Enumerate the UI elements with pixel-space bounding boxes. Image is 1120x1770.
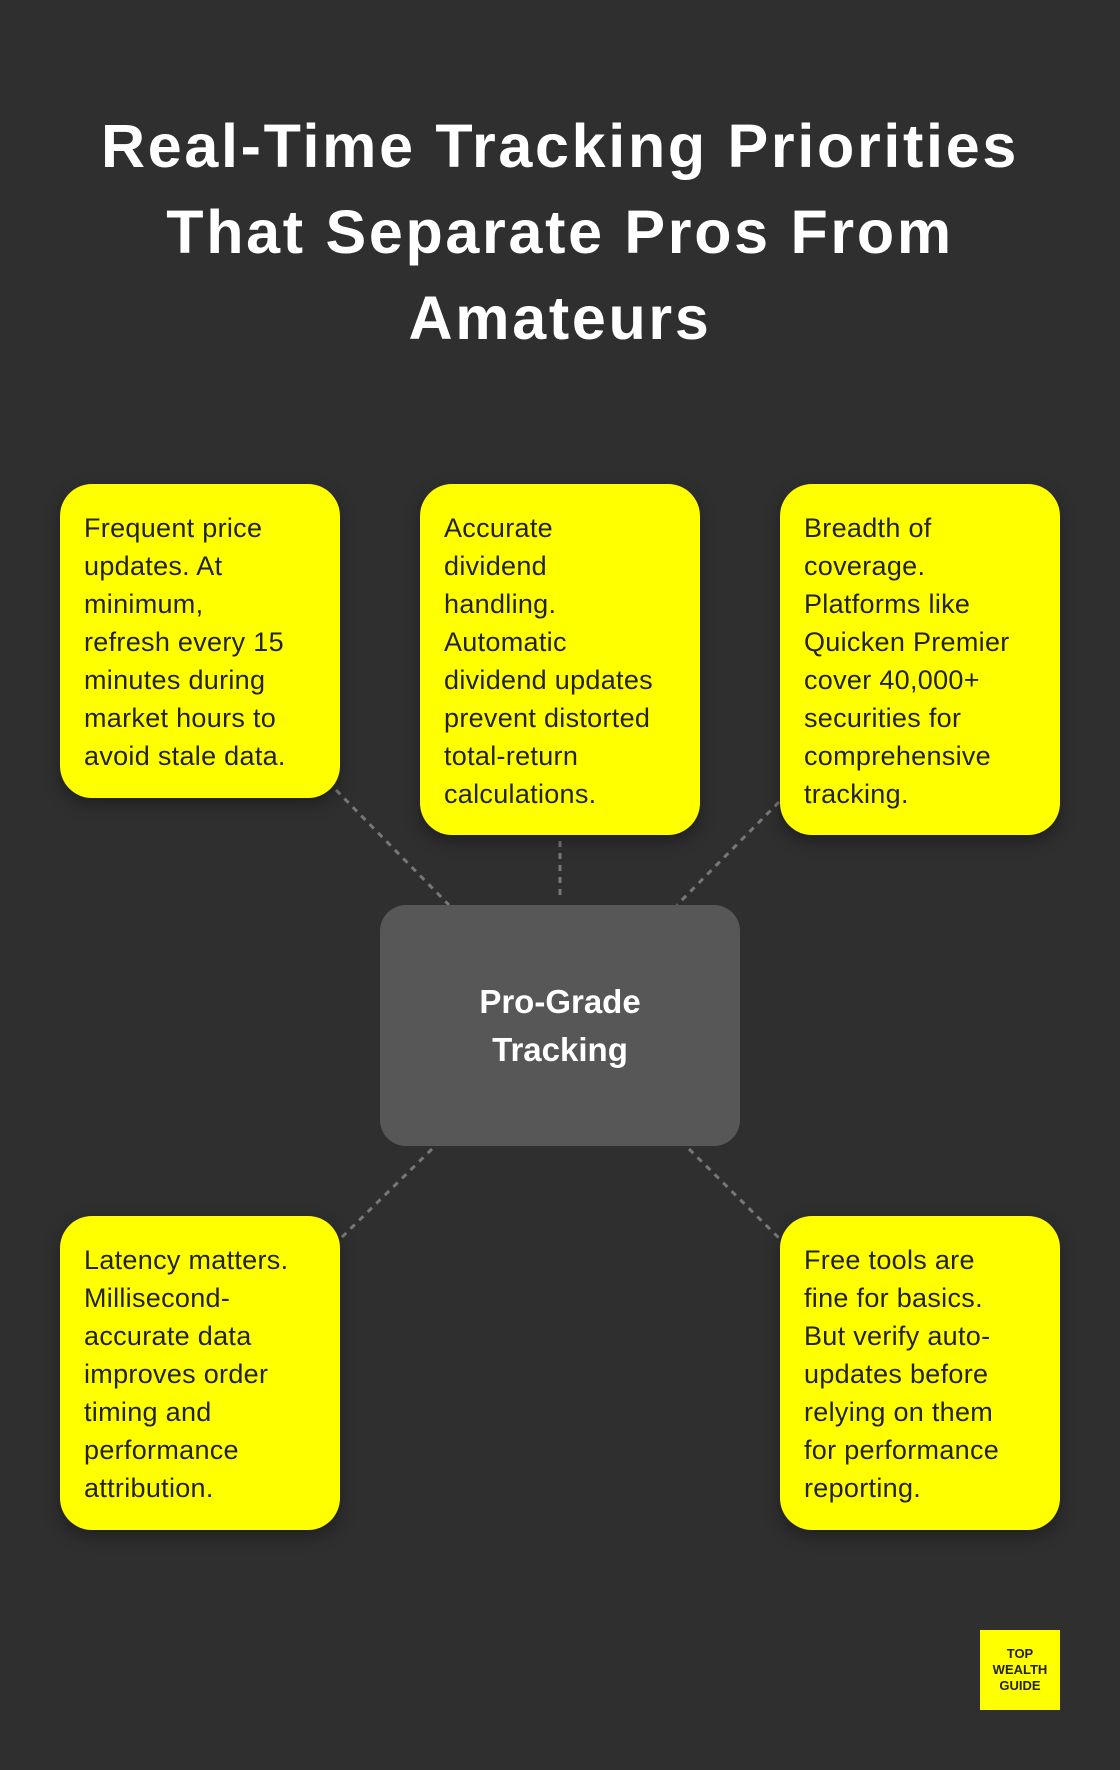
panel: breadth of coverage: Platforms like [804, 589, 970, 619]
panel: latency: timing and [84, 1397, 212, 1427]
panel: frequent price updates: updates. At [84, 551, 222, 581]
panel: free tools: for performance [804, 1435, 999, 1465]
panel: dividend handling: total-return [444, 741, 578, 771]
panel: breadth of coverage: comprehensive [804, 741, 991, 771]
panel: frequent price updates: Frequent price [84, 513, 262, 543]
panel: dividend handling: Accurate [444, 513, 553, 543]
panel: free tools: relying on them [804, 1397, 993, 1427]
panel: frequent price updates: refresh every 15 [84, 627, 284, 657]
panel: free tools [780, 1216, 1060, 1530]
panel: latency: Millisecond- [84, 1283, 230, 1313]
panel: latency [60, 1216, 340, 1530]
panel: free tools: But verify auto- [804, 1321, 990, 1351]
center node: Tracking [492, 1030, 628, 1068]
panel: latency: accurate data [84, 1321, 252, 1351]
panel: breadth of coverage: cover 40,000+ [804, 665, 980, 695]
panel: frequent price updates: avoid stale data. [84, 741, 286, 771]
panel: breadth of coverage [780, 484, 1060, 835]
logo [980, 1630, 1060, 1710]
panel: latency: performance [84, 1435, 239, 1465]
panel: dividend handling: calculations. [444, 779, 596, 809]
title: Real-Time Tracking Priorities [101, 112, 1019, 180]
panel: frequent price updates: minutes during [84, 665, 265, 695]
title [101, 112, 1019, 352]
logo: TOP [1007, 1646, 1033, 1661]
panel: free tools: updates before [804, 1359, 988, 1389]
title: Amateurs [408, 284, 711, 352]
logo: GUIDE [999, 1678, 1041, 1693]
panel: breadth of coverage: Quicken Premier [804, 627, 1010, 657]
center node [380, 905, 740, 1146]
panel: latency: Latency matters. [84, 1245, 288, 1275]
panel: frequent price updates: market hours to [84, 703, 276, 733]
panel: dividend handling [420, 484, 700, 835]
panel: free tools: reporting. [804, 1473, 921, 1503]
panel: dividend handling: dividend [444, 551, 547, 581]
panel: breadth of coverage: securities for [804, 703, 961, 733]
title: That Separate Pros From [166, 198, 954, 266]
center node: Pro-Grade [479, 982, 641, 1020]
panel: latency: attribution. [84, 1473, 214, 1503]
panel: latency: improves order [84, 1359, 268, 1389]
panel: breadth of coverage: coverage. [804, 551, 925, 581]
panel: dividend handling: Automatic [444, 627, 567, 657]
panel: dividend handling: handling. [444, 589, 556, 619]
panel: free tools: fine for basics. [804, 1283, 983, 1313]
panel: dividend handling: prevent distorted [444, 703, 650, 733]
panel: frequent price updates: minimum, [84, 589, 203, 619]
logo: WEALTH [993, 1662, 1047, 1677]
panel: dividend handling: dividend updates [444, 665, 653, 695]
panel: breadth of coverage: Breadth of [804, 513, 932, 543]
panel: free tools: Free tools are [804, 1245, 975, 1275]
panel: frequent price updates [60, 484, 340, 798]
panel: breadth of coverage: tracking. [804, 779, 909, 809]
